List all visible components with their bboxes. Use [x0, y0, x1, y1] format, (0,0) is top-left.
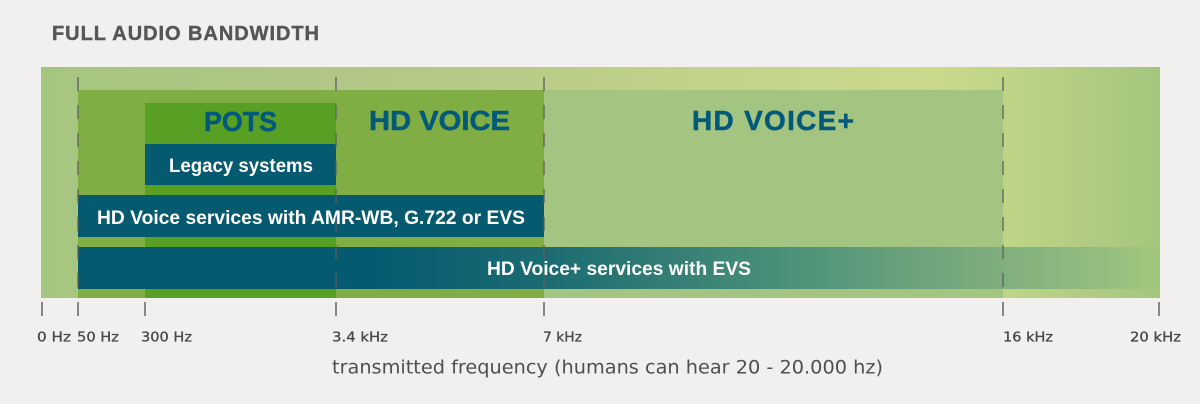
heading: POTS: POTS — [204, 106, 277, 137]
axis labels: 16 kHz — [1003, 330, 1053, 346]
axis labels — [37, 330, 1181, 346]
axis labels: 7 kHz — [543, 330, 582, 346]
band: full audio bandwidth — [41, 67, 1160, 298]
axis labels: 20 kHz — [1130, 330, 1181, 346]
axis title: transmitted frequency (humans can hear 20 - 20.000 hz) — [332, 356, 883, 378]
bar: HD Voice services — [78, 195, 544, 237]
chart: frequency bands — [41, 67, 1160, 298]
band: low frequency range up to 7 kHz — [78, 90, 544, 298]
title: FULL AUDIO BANDWIDTH — [52, 23, 319, 45]
axis labels: 50 Hz — [77, 330, 119, 346]
band: HD Voice+ — [544, 90, 1003, 298]
axis labels: 300 Hz — [141, 330, 192, 346]
bar: HD Voice services: HD Voice services with AMR-WB, G.722 or EVS — [97, 208, 525, 229]
bar: legacy systems — [145, 144, 336, 185]
heading: HD Voice+: HD VOICE+ — [692, 105, 854, 136]
axis labels: 0 Hz — [37, 330, 71, 346]
bar: legacy systems: Legacy systems — [169, 156, 313, 177]
heading: HD Voice: HD VOICE — [369, 105, 510, 136]
axis labels: 3.4 kHz — [332, 330, 388, 346]
band: POTS — [145, 103, 336, 298]
dashed frequency markers — [78, 77, 1003, 289]
bar: HD Voice+ services: HD Voice+ services with EVS — [487, 259, 751, 280]
axis ticks — [42, 302, 1159, 316]
bar: HD Voice+ services — [78, 247, 1160, 289]
